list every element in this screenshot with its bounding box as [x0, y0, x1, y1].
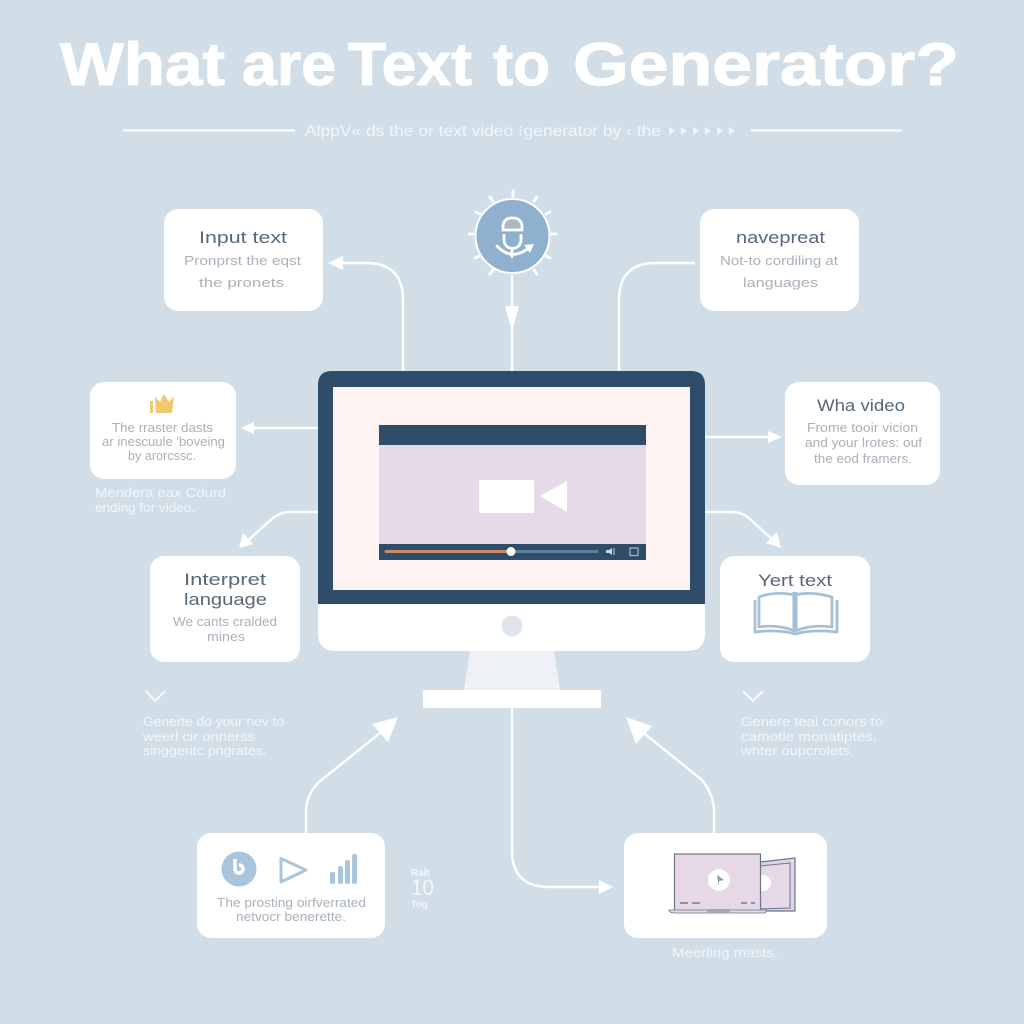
text block: below interpret card	[142, 715, 284, 758]
panel: crown card: ar inescuule 'boveing	[102, 435, 225, 449]
panel: bottom left: The prosting oirfverrated	[217, 896, 366, 910]
panel: input text	[164, 209, 323, 311]
text block: below yert card	[740, 715, 883, 758]
laptop base	[669, 910, 766, 913]
monitor screen	[333, 387, 690, 590]
video player	[379, 425, 646, 560]
stat: 10: Ralt	[411, 868, 431, 879]
front screen	[674, 854, 760, 911]
monitor chin	[318, 604, 705, 651]
title: Generator?	[573, 31, 959, 98]
text block: below interpret card: singgeritc pngrates.	[143, 744, 267, 758]
panel: bottom right	[624, 833, 827, 938]
panel: what video: the eod framers.	[814, 452, 912, 466]
panel: what video: Frome tooir vicion	[807, 421, 918, 435]
caption: below bottom right card: Meerling masts.	[672, 945, 778, 960]
panel: what video: and your lrotes: ouf	[805, 436, 923, 450]
monitor base	[423, 690, 601, 708]
icon: open book	[755, 592, 837, 634]
monitor bezel	[318, 371, 705, 604]
panel: navepreat: navepreat	[736, 228, 825, 247]
arrow: monitor to input text	[328, 256, 403, 370]
panel: interpret language: language	[184, 590, 267, 609]
text block: below interpret card: Generte do your nev to	[143, 715, 284, 729]
panel: what video	[785, 382, 940, 485]
text block: below yert card: Genere teal conors to	[741, 715, 883, 729]
panel: interpret language	[150, 556, 300, 662]
panel: interpret language: We cants cralded	[173, 614, 277, 629]
chevron right	[743, 691, 763, 701]
chevron left	[146, 691, 165, 701]
text block: below yert card: camotle monatiptes,	[741, 730, 877, 744]
panel: crown card: by arorcssc.	[128, 449, 196, 463]
monitor	[318, 371, 705, 708]
subtitle with rules: AlppV« ds the or text video ⁝generator by ‹ the	[305, 123, 661, 140]
arrow: monitor to crown card	[241, 422, 317, 434]
panel: crown card: The rraster dasts	[112, 421, 213, 435]
arrow: monitor to what video card	[706, 431, 782, 443]
panel: bottom left: netvocr benerette.	[236, 910, 346, 924]
text block: below crown card	[95, 486, 226, 515]
arrow: bottom right card to monitor	[626, 717, 714, 833]
panel: navepreat	[700, 209, 859, 311]
panel: interpret language: Interpret	[184, 570, 266, 589]
text block: below crown card: Mendera eax Cdurd	[95, 486, 226, 500]
panel: navepreat: Not-to cordiling at	[720, 253, 838, 268]
title: to	[493, 31, 550, 98]
text block: below interpret card: weerl cir onnerss	[142, 730, 255, 744]
panel: bottom left	[197, 833, 385, 938]
icon: signal bars	[330, 854, 357, 884]
panel: crown card	[90, 382, 236, 479]
subtitle with rules	[123, 123, 902, 140]
panel: what video: Wha video	[817, 396, 905, 415]
monitor stand	[464, 651, 560, 690]
arrow: microphone to monitor	[505, 276, 519, 370]
title: Text	[348, 31, 472, 98]
panel: input text: the pronets	[199, 275, 285, 290]
arrow: monitor to interpret card	[239, 512, 317, 548]
arrow: bottom left card to monitor	[306, 717, 398, 833]
arrow: navepreat to monitor	[619, 263, 694, 370]
icon: microphone badge	[469, 191, 556, 274]
icon: play	[281, 858, 306, 882]
stat: 10	[411, 868, 434, 910]
video controls	[379, 544, 646, 560]
icon: pie disc	[222, 852, 256, 886]
panel: yert text: Yert text	[758, 571, 832, 590]
panel: navepreat: languages	[743, 275, 819, 290]
title: are	[242, 31, 336, 98]
stat: 10: Tog	[411, 899, 428, 910]
icon: crown	[150, 394, 174, 413]
arrow: monitor to bottom right card	[512, 708, 613, 894]
monitor power button	[502, 616, 522, 636]
arrow: monitor to yert card	[706, 512, 781, 548]
title: What	[60, 31, 225, 98]
panel: interpret language: mines	[207, 629, 246, 644]
icon: video camera	[479, 480, 567, 513]
text block: below crown card: ending for video.	[95, 501, 195, 515]
panel: yert text	[720, 556, 870, 662]
back screen	[760, 858, 795, 911]
stat: 10: 10	[411, 875, 434, 900]
panel: input text: Pronprst the eqst	[184, 253, 301, 268]
icon: laptops with video	[669, 854, 795, 913]
panel: input text: Input text	[199, 228, 287, 247]
text block: below yert card: whter oupcrolets.	[740, 744, 854, 758]
